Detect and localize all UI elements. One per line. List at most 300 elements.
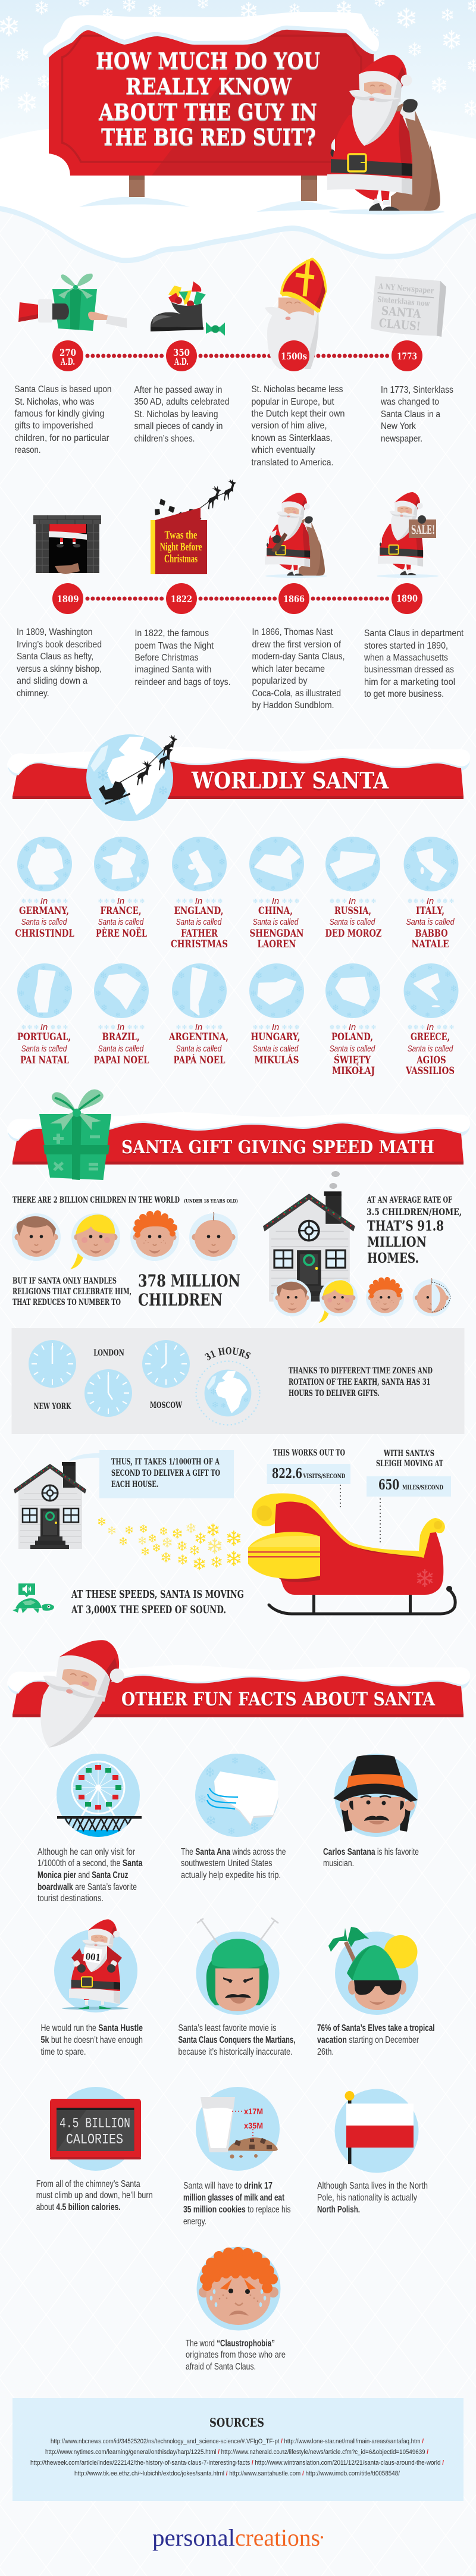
icon: earth with 31 hours [195,1347,261,1426]
label: Argentina: In [195,1022,202,1032]
icon: gift exchanged [18,274,127,331]
label: China: Santa is called [253,917,299,927]
text: Carlos Santana is his favorite [323,1847,419,1857]
stat: 822.6 visits/second: THIS WORKS OUT TO [273,1448,345,1458]
stat: 650 miles/second: 650 [378,1477,399,1493]
icon: newspaper: A NY Newspaper [378,282,434,296]
text: 1773 [380,385,453,444]
text: 1890: when a Massachusetts [364,653,448,663]
label: China: SHENGDAN [250,928,303,940]
fact: 4.5 billion calories [36,2087,153,2212]
text: 1890: Santa Claus in department [364,628,464,638]
timeline row 2 [17,478,464,710]
text: time to spare. [40,2047,86,2057]
icon: santa runner [54,1919,137,2012]
stat: 822.6 visits/second: 822.6 [272,1466,302,1482]
headline: ABOUT THE GUY IN [98,99,317,125]
text: 1822: poem Twas the Night [134,641,214,651]
label: France: Santa is called [98,917,144,927]
text: He would run the Santa Hustle [40,2023,143,2033]
speed section [12,1448,455,1616]
text: 350 AD: children’s shoes. [134,434,195,444]
text: 1822 [134,628,231,687]
label: Russia [325,896,382,940]
text: 1866: popularized by [252,676,308,686]
label: Germany: Santa is called [21,917,67,927]
text: religions that celebrate [12,1276,131,1307]
text [178,2023,295,2057]
heading: WORLDLY SANTA [191,767,389,794]
label: Portugal: Santa is called [21,1044,67,1054]
text: 1809: In 1809, Washington [17,627,93,637]
text: tourist destinations. [37,1893,104,1904]
country: Hungary [249,963,304,1018]
text: 270 AD: Santa Claus is based upon [14,384,112,395]
label: Portugal [17,1022,71,1066]
fact: santa hustle [40,1919,143,2057]
header snowflakes [0,0,476,116]
text: 1/1000th of a second, the Santa [37,1858,143,1868]
icon: martian head [196,1918,280,2015]
text: 270 AD [14,384,112,455]
dotted timeline [87,353,391,358]
icon: US map with winds [195,1754,278,1837]
icon: storybook with reindeer [151,478,240,574]
title sign [43,12,444,214]
icon: turtle with sound [12,1583,54,1613]
stat: 378 million children [138,1271,240,1310]
text: afraid of Santa Claus. [186,2362,256,2372]
text: 1500s: popular in Europe, but [251,397,334,407]
text: 1500s: St. Nicholas became less [251,384,343,395]
label: Hungary: In [272,1022,279,1032]
text: 31 hours: HOURS TO DELIVER GIFTS. [289,1389,380,1398]
text: 31 hours [289,1366,433,1398]
label: Portugal: PORTUGAL, [17,1031,71,1043]
source links: http://www.nytimes.com/learning/general/onthisday/harp/1225.html / http://www.nzherald.co.nz/lifestyle/news/article.cfm?c_id=6&objectid=10549639 / [45,2449,428,2456]
label: Poland: ŚWIĘTY [334,1054,371,1066]
text: speed of sound: AT THESE SPEEDS, SANTA IS MOVING [71,1588,244,1601]
text: Although he can only visit for [37,1847,135,1857]
year badge 1866: 1866 [283,593,305,605]
source links [30,2438,444,2477]
stat: 650 miles/second [367,1449,451,1497]
fact: north polish [317,2089,428,2215]
year badge 1809 [52,583,83,614]
country: China [249,837,304,891]
clock: new york [29,1340,76,1388]
text: 270 AD: St. Nicholas, who was [14,397,95,407]
label: Poland: POLAND, [331,1031,373,1043]
text: 1866: In 1866, Thomas Nast [252,627,333,637]
logo: personal creations [152,2524,323,2551]
text [183,2181,291,2227]
icon: calorie counter [50,2087,141,2171]
text: 350 AD: St. Nicholas by leaving [134,409,218,420]
label: Greece: In [427,1022,434,1032]
label: China [250,896,303,950]
text [181,1847,286,1880]
text: 1500s: which eventually [251,445,315,455]
source links: http://www.nbcnews.com/id/34525202/ns/technology_and_science-science/#.VFlgO_TF-pt / http://www.lone-star.net/mall/main-areas/santafaq.htm / [51,2438,424,2445]
icon: ferris wheel [54,1754,143,1842]
icon: flying snow trail [98,1517,240,1570]
callout: 1/1000th second: SECOND TO DELIVER A GIFT TO [111,1469,220,1478]
icon: santa's sleigh [248,1494,455,1614]
text: 1500s: known as Sinterklaas, [251,433,332,443]
header winter scene [0,0,476,263]
icon: milk and cookies [196,2087,280,2171]
year badge 1890: 1890 [396,593,418,604]
santa with sack [327,55,440,211]
stat: 822.6 visits/second: VISITS/SECOND [303,1473,345,1480]
banner: worldly santa [7,734,470,821]
text: 1890: stores started in 1890, [364,641,448,651]
year badge 350 A.D.: A.D. [174,356,189,367]
stat: 378 million children: CHILDREN [138,1290,223,1310]
text: 1500s: version of him alive, [251,421,327,431]
text: boardwalk are Santa’s favorite [37,1882,137,1892]
label: Poland: MIKOŁAJ [332,1065,375,1077]
text: 26th. [317,2047,334,2057]
dotted timeline [87,596,391,601]
text: 270 AD: reason. [14,445,40,455]
text: 1773: New York [381,421,416,431]
icon: newspaper: CLAUS! [378,315,421,333]
stat: 378 million children: 378 MILLION [138,1271,240,1291]
icon: santa with sale sign: SALE! [411,522,435,537]
year badge 350 A.D.: 350 [173,347,190,358]
headline: HOW MUCH DO YOU [96,48,320,74]
text: 2 billion children: (UNDER 18 YEARS OLD) [184,1198,238,1204]
label: Italy: In [427,896,434,906]
year badge 270 A.D.: 270 [60,347,76,358]
callout: 1/1000th second [68,1450,234,1498]
text: 1822: Before Christmas [134,653,199,663]
country: Greece [403,963,458,1018]
label: England [171,896,228,950]
label: Italy [406,896,455,950]
label: Russia: In [349,896,356,906]
clock labels: NEW YORK [33,1402,71,1411]
text: 1866 [252,627,345,710]
label: Germany: GERMANY, [19,905,69,917]
fact: santa ana winds [181,1754,286,1880]
timeline row 1 [14,259,453,468]
text: 91.8 million homes [367,1195,462,1266]
icon: boot with candy [151,281,225,336]
stat: 822.6 visits/second [267,1448,350,1484]
icon: bishop St. Nicholas [265,259,325,369]
icon: calorie counter: CALORIES [66,2132,123,2148]
icon: storybook with reindeer: Christmas [164,553,198,565]
text: Santa will have to drink 17 [183,2181,273,2191]
text: 1890: him for a marketing tool [364,677,455,687]
text: actually help expedite his trip. [181,1870,281,1880]
text [317,2181,428,2215]
icon: globe with santa's sleigh [86,734,178,821]
label: Hungary: MIKULÁS [255,1054,299,1066]
label: Hungary [251,1022,300,1066]
label: Brazil [94,1022,149,1066]
year badge 1773 [392,340,422,371]
text: 350 AD: small pieces of candy in [134,421,223,431]
label: Italy: BABBO [415,928,448,940]
text: 1822: reindeer and bags of toys. [134,677,231,687]
text: 350 AD: 350 AD, adults celebrated [134,397,230,407]
country: Italy [403,837,458,891]
red board [49,27,374,176]
country: England [172,837,227,891]
label: Poland: Santa is called [330,1044,375,1054]
headline: THE BIG RED SUIT? [101,124,316,150]
text: religions that celebrate: THAT REDUCES TO NUMBER TO [12,1298,121,1307]
label: China: In [272,896,279,906]
label: England: In [195,896,202,906]
text: 1822: In 1822, the famous [134,628,209,638]
text: energy. [183,2217,206,2227]
text: because it’s historically inaccurate. [178,2047,293,2057]
fact: milk and cookies [183,2087,291,2227]
logo: personal creations: personal [152,2524,235,2551]
year badge 350 A.D. [166,340,197,371]
label: Poland [330,1022,375,1077]
label: Russia: Santa is called [330,917,375,927]
logo: personal creations: creations [235,2524,320,2551]
sign posts [129,176,317,201]
label: Argentina: ARGENTINA, [168,1031,228,1043]
country: Argentina [172,963,227,1018]
label: France: PÈRE NOËL [96,927,147,940]
label: Greece [405,1022,455,1077]
label: England: CHRISTMAS [171,938,228,950]
label: Brazil: Santa is called [98,1044,144,1054]
text: Pole, his nationality is actually [317,2193,417,2203]
callout: 1/1000th second: THUS, IT TAKES 1/1000TH OF A [111,1457,220,1467]
clock labels [33,1348,182,1411]
snow drifts [79,197,444,214]
text: From all of the chimney’s Santa [36,2179,140,2189]
text: 76% of Santa’s Elves take a tropical [317,2023,434,2033]
year badge 1500s [278,340,309,371]
label: Russia: RUSSIA, [334,905,371,917]
text: 350 AD [134,385,230,444]
text: 1866: drew the first version of [252,640,342,650]
label: Greece: GREECE, [411,1031,450,1043]
heading: SANTA GIFT GIVING SPEED MATH [121,1137,434,1158]
text: 1809 [17,627,102,699]
children math [12,1171,462,1323]
faces: four children [12,1210,238,1269]
clock labels: LONDON [93,1348,124,1358]
label: Greece: Santa is called [408,1044,453,1054]
label: Portugal: In [40,1022,48,1032]
country: Germany [17,837,72,891]
snow ground [0,129,476,263]
text: 1773: Santa Claus in a [381,409,440,420]
text: 35 million cookies to replace his [183,2205,291,2215]
text: 350 AD: After he passed away in [134,385,223,395]
text: 1890: businessman dressed as [364,665,454,675]
text [186,2339,286,2372]
label: Hungary: HUNGARY, [251,1031,300,1043]
label: China: LAOREN [257,938,296,950]
text: 2 billion children: THERE ARE 2 BILLION CHILDREN IN THE WORLD [12,1195,180,1205]
icon: newspaper: Sinterklaas now [377,295,431,308]
text: 91.8 million homes: HOMES. [367,1250,419,1266]
text [40,2023,143,2057]
year badge 1809: 1809 [57,593,79,605]
year badge 270 A.D.: A.D. [60,356,75,367]
text: 1866: modern-day Santa Claus, [252,652,345,662]
headline: REALLY KNOW [126,73,292,99]
label: Argentina: Santa is called [176,1044,222,1054]
label: Germany: CHRISTINDL [15,928,74,940]
label: Brazil: PAPAI NOEL [94,1054,149,1066]
label: Argentina [168,1022,228,1066]
text: 1809: and sliding down a [17,676,87,686]
icon: polish flag [334,2089,419,2173]
icon: storybook with reindeer: Night Before [159,541,202,553]
banner: other fun facts about santa [7,1630,470,1759]
clock: london [84,1369,132,1417]
text: southwestern United States [181,1858,273,1868]
icon: carlos santana face [333,1754,418,1837]
panel: time zones [12,1328,464,1434]
text: 1773: newspaper. [381,434,422,444]
year badge 1890 [392,583,422,614]
label: France [96,896,147,940]
icon: newspaper [371,276,446,337]
text: Monica pier and Santa Cruz [37,1870,129,1880]
text: 91.8 million homes: MILLION [367,1234,427,1250]
heading: SOURCES [209,2415,264,2430]
label: England: FATHER [181,928,218,940]
text: 1890 [364,628,464,699]
text: 1890: to get more business. [364,689,444,699]
year badge 270 A.D. [52,340,83,371]
stat: 650 miles/second: MILES/SECOND [402,1484,443,1491]
text: 1809: Santa Claus as hefty, [17,652,93,662]
icon: santa runner: 001 [85,1951,101,1963]
text: 1773: In 1773, Sinterklass [381,385,453,395]
text: 1866: which later became [252,664,325,674]
text: million glasses of milk and eat [183,2193,284,2203]
text: Santa’s least favorite movie is [178,2023,277,2033]
label: Poland: In [349,1022,356,1032]
text: speed of sound: AT 3,000X THE SPEED OF SOUND. [71,1604,226,1616]
text: 1809: chimney. [17,688,49,699]
country: Brazil [94,963,149,1018]
text [37,1847,143,1904]
icon: santa head [30,1630,130,1759]
label: Italy: ITALY, [416,905,444,917]
stat: 650 miles/second: SLEIGH MOVING AT [376,1459,443,1469]
label: Portugal: PAI NATAL [20,1054,69,1066]
text: 270 AD: gifts to impoverished [14,421,93,431]
faces: 3.5 children per home [273,1277,450,1323]
label: Russia: DED MOROZ [325,928,382,940]
label: Italy: Santa is called [406,917,455,927]
stat: 650 miles/second: WITH SANTA’S [383,1449,434,1458]
label: Greece: AGIOS [416,1054,446,1066]
label: Brazil: BRAZIL, [102,1031,139,1043]
text [317,2023,434,2057]
clock labels: MOSCOW [150,1401,182,1410]
label: Germany [15,896,74,940]
text: 1809: versus a skinny bishop, [17,664,102,674]
label: Greece: VASSILIOS [405,1065,455,1077]
fact: santa monica pier [37,1754,143,1904]
countries row 1 [15,837,458,950]
fact: carlos santana [323,1754,419,1868]
text: 270 AD: children, for no particular [14,433,109,443]
text: 1500s: the Dutch kept their own [251,409,345,419]
callout: 1/1000th second: EACH HOUSE. [111,1480,158,1489]
fact: santa claus conquers the martians [178,1918,295,2057]
text: about 4.5 billion calories. [36,2202,121,2212]
text: 1866: by Haddon Sundblom. [252,700,334,710]
text: 1822: imagined Santa with [134,665,212,675]
country: Portugal [17,963,72,1018]
year badge 1773: 1773 [397,350,417,362]
text: The Santa Ana winds across the [181,1847,286,1857]
year badge 1866 [278,583,309,614]
icon: storybook with reindeer: Twas the [164,529,198,542]
label: France: In [117,896,124,906]
text: Although Santa lives in the North [317,2181,428,2191]
text: 270 AD: famous for kindly giving [14,409,105,419]
text: musician. [323,1858,354,1868]
text: 1500s: translated to America. [251,458,333,468]
text [323,1847,419,1868]
icon: santa with sale sign [377,492,439,578]
text: religions that celebrate: RELIGIONS THAT CELEBRATE HIM, [12,1287,131,1297]
label: France: FRANCE, [100,905,142,917]
text: vacation starting on December [317,2035,419,2045]
label: Argentina: PAPÁ NOEL [174,1054,226,1066]
text: 1809: Irving’s book described [17,640,102,650]
fact: elves tropical vacation [317,1927,434,2057]
icon: milk and cookies: x17M [244,2107,263,2116]
text: Santa Claus Conquers the Martians, [178,2035,295,2045]
heading: OTHER FUN FACTS ABOUT SANTA [121,1689,436,1710]
countries row 2 [17,963,458,1077]
headline [96,48,320,150]
country: France [94,837,149,891]
icon: math gift box [39,1090,111,1180]
label: Germany: In [40,896,48,906]
label: England: Santa is called [176,917,222,927]
year badge 1822 [166,583,197,614]
text: 91.8 million homes: THAT’S 91.8 [367,1218,444,1234]
icon: calorie counter: 4.5 BILLION [60,2116,130,2132]
year badge 1500s: 1500s [281,350,307,362]
text: must climb up and down, he’ll burn [36,2190,153,2201]
text: North Polish. [317,2205,360,2215]
text: 1500s [251,384,345,468]
icon: santa with coca-cola [265,493,327,578]
source links: http://theweek.com/article/index/222142/the-history-of-santa-claus-7-interesting-facts / http://www.wintranslation.com/2011/12/21/santa-claus-around-the-world / [30,2459,444,2467]
text: originates from those who are [186,2350,286,2360]
label: Brazil: In [117,1022,124,1032]
label: China: CHINA, [258,905,293,917]
text: speed of sound [71,1588,244,1616]
icon: elf with palm and sun [328,1927,418,2015]
icon: scared redhead [196,2247,281,2330]
country: Poland [325,963,380,1018]
icon: earth with 31 hours: 31 HOURS [205,1347,251,1360]
